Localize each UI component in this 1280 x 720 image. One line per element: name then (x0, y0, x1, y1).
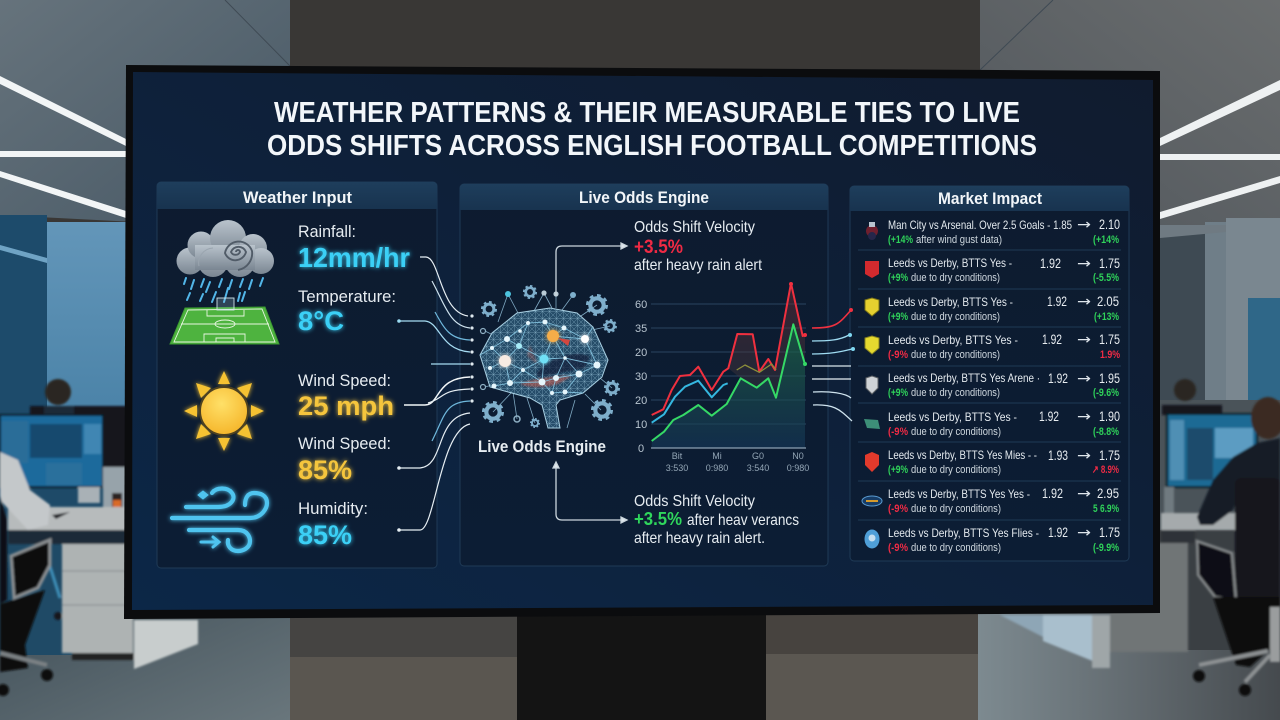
row 3: Leeds vs Derby: (+9% (888, 311, 908, 323)
chart y-axis labels: 0 (638, 443, 644, 455)
metric: rainfall: 12mm/hr (298, 242, 410, 273)
title: ODDS SHIFTS ACROSS ENGLISH FOOTBALL COMPETITIONS (267, 130, 1037, 162)
icon: rain cloud with spiral (176, 220, 274, 302)
row 2: Leeds vs Derby: (-5.5% (1093, 272, 1119, 284)
callout: odds shift velocity down: Odds Shift Velocity (634, 493, 755, 510)
row 6: Leeds vs Derby: due to dry conditions) (911, 426, 1001, 438)
weather panel header (157, 182, 437, 209)
row 3: Leeds vs Derby: Leeds vs Derby, BTTS Yes - (888, 295, 1013, 309)
row 8: Leeds vs Derby: → (1077, 486, 1091, 502)
callout: odds shift velocity down: after heavy rain alert. (634, 530, 765, 547)
metric: humidity: Humidity: (298, 499, 368, 518)
metric: wind speed percentage: 85% (298, 455, 352, 485)
metric: rainfall: Rainfall: (298, 222, 356, 241)
row 4: Leeds vs Derby: 1.75 (1099, 332, 1120, 347)
row 2: Leeds vs Derby: 1.92 (1040, 256, 1061, 271)
row 1: Man City vs Arsenal (866, 217, 1120, 246)
connectors: chart to market impact (812, 308, 855, 421)
row 9: Leeds vs Derby: (-9% (888, 542, 908, 554)
row 5: Leeds vs Derby: 1.92 (1048, 371, 1068, 386)
row 9: Leeds vs Derby: 1.75 (1099, 525, 1120, 540)
arrow: brain to odds shift up (556, 243, 627, 296)
row 1: Man City vs Arsenal: (+14% (888, 234, 913, 246)
row 7: Leeds vs Derby: due to dry conditions) (911, 464, 1001, 476)
row 8: Leeds vs Derby (862, 486, 1119, 515)
row 2: Leeds vs Derby (865, 256, 1120, 284)
chart x-axis labels: 0:980 (787, 463, 809, 473)
row 5: Leeds vs Derby: 1.95 (1099, 371, 1120, 386)
chart y-axis labels: 35 (635, 323, 647, 335)
row 2: Leeds vs Derby: → (1077, 256, 1091, 272)
row 3: Leeds vs Derby: 1.92 (1047, 294, 1067, 309)
row 4: Leeds vs Derby: Leeds vs Derby, BTTS Yes - (888, 333, 1018, 347)
row 5: Leeds vs Derby: → (1077, 371, 1091, 387)
chart x-axis labels: 3:540 (747, 463, 769, 473)
row 4: Leeds vs Derby (865, 332, 1120, 361)
row 1: Man City vs Arsenal: → (1077, 217, 1091, 233)
row 6: Leeds vs Derby (864, 409, 1120, 438)
office scene right: desk, monitor and workers (1000, 379, 1280, 696)
row 5: Leeds vs Derby (866, 371, 1120, 399)
metric: wind speed: 25 mph (298, 391, 394, 421)
line chart: odds movement (635, 282, 809, 473)
row 5: Leeds vs Derby: Leeds vs Derby, BTTS Yes Arene · (888, 371, 1040, 385)
market panel header (850, 186, 1129, 211)
market panel header: Market Impact (938, 189, 1042, 208)
row 3: Leeds vs Derby: 2.05 (1097, 294, 1119, 309)
row 9: Leeds vs Derby: due to dry conditions) (911, 542, 1001, 554)
row 1: Man City vs Arsenal: Man City vs Arsenal. Over 2.5 Goals - 1.85 (888, 218, 1072, 232)
metric: wind speed percentage: Wind Speed: (298, 434, 391, 453)
row 9: Leeds vs Derby (864, 525, 1120, 554)
row 9: Leeds vs Derby: Leeds vs Derby, BTTS Yes Flies - (888, 526, 1039, 540)
row 6: Leeds vs Derby: 1.90 (1099, 409, 1120, 424)
row 7: Leeds vs Derby (865, 448, 1120, 476)
chart y-axis labels: 60 (635, 299, 647, 311)
row 2: Leeds vs Derby: (+9% (888, 272, 908, 284)
metric: wind speed: Wind Speed: (298, 371, 391, 390)
chart y-axis labels: 30 (635, 371, 647, 383)
row 6: Leeds vs Derby: (-8.8% (1093, 426, 1119, 438)
row 7: Leeds vs Derby: 1.75 (1099, 448, 1120, 463)
title (267, 97, 1037, 162)
panel: live odds engine (460, 184, 828, 566)
metric: humidity: 85% (298, 520, 352, 550)
ceiling lights right (1160, 80, 1280, 219)
live odds panel header: Live Odds Engine (579, 188, 709, 207)
row 6: Leeds vs Derby: (-9% (888, 426, 908, 438)
metric: wind speed percentage (298, 434, 391, 485)
chart y-axis labels: 20 (635, 347, 647, 359)
row 1: Man City vs Arsenal: (+14% (1093, 234, 1119, 246)
weather panel header: Weather Input (243, 188, 352, 207)
row 8: Leeds vs Derby: due to dry conditions) (911, 503, 1001, 515)
row 7: Leeds vs Derby: (+9% (888, 464, 908, 476)
icon gears around brain (480, 286, 619, 427)
callout: odds shift velocity down: +3.5% (634, 509, 682, 529)
panel: market impact (850, 186, 1129, 561)
row 9: Leeds vs Derby: (-9.9% (1093, 542, 1119, 554)
icon: wind (172, 488, 267, 551)
wall screen right (1248, 298, 1280, 400)
chart x-axis labels: 3:530 (666, 463, 688, 473)
row 6: Leeds vs Derby: 1.92 (1039, 409, 1059, 424)
row 1: Man City vs Arsenal: 2.10 (1099, 217, 1120, 232)
row 8: Leeds vs Derby: 1.92 (1042, 486, 1063, 501)
chart y-axis labels (635, 299, 647, 455)
metric: temperature: Temperature: (298, 287, 396, 306)
callout: odds shift velocity up (634, 219, 762, 274)
row 9: Leeds vs Derby: → (1077, 525, 1091, 541)
row 7: Leeds vs Derby: 1.93 (1048, 448, 1068, 463)
arrow: brain to odds shift down (553, 462, 627, 523)
chart x-axis labels: 0:980 (706, 463, 728, 473)
display frame (124, 65, 1160, 619)
row 8: Leeds vs Derby: 5 6.9% (1093, 503, 1119, 515)
row 4: Leeds vs Derby: due to dry conditions) (911, 349, 1000, 361)
row 8: Leeds vs Derby: Leeds vs Derby, BTTS Yes Yes - (888, 487, 1030, 501)
row 8: Leeds vs Derby: (-9% (888, 503, 908, 515)
row 1: Man City vs Arsenal: after wind gust data) (916, 234, 1002, 246)
row 4: Leeds vs Derby: → (1077, 332, 1091, 348)
metric: rainfall (298, 222, 410, 273)
metric: temperature: 8°C (298, 306, 344, 336)
row 6: Leeds vs Derby: → (1077, 409, 1091, 425)
chart x-axis labels: G0 (752, 451, 764, 461)
metric: temperature (298, 287, 396, 336)
title: WEATHER PATTERNS & THEIR MEASURABLE TIES TO LIVE (274, 97, 1020, 129)
row 7: Leeds vs Derby: ↗ 8.9% (1092, 464, 1119, 476)
ceiling lights left (0, 76, 126, 218)
chart y-axis labels: 10 (635, 419, 647, 431)
chart x-axis labels: Mi (712, 451, 722, 461)
row 7: Leeds vs Derby: → (1077, 448, 1091, 464)
metric: wind speed (298, 371, 394, 421)
row 6: Leeds vs Derby: Leeds vs Derby, BTTS Yes - (888, 410, 1017, 424)
display pedestal (517, 612, 766, 720)
row 2: Leeds vs Derby: Leeds vs Derby, BTTS Yes - (888, 256, 1012, 270)
callout: odds shift velocity up: +3.5% (634, 237, 683, 258)
row 9: Leeds vs Derby: 1.92 (1048, 525, 1068, 540)
connectors: weather inputs to engine (397, 257, 474, 532)
display screen (132, 72, 1153, 610)
icon: football pitch (170, 298, 279, 344)
row 5: Leeds vs Derby: (+9% (888, 387, 908, 399)
row 5: Leeds vs Derby: (-9.6% (1093, 387, 1119, 399)
chart x-axis labels (666, 451, 809, 473)
office scene left: desk, monitor and workers (0, 379, 198, 696)
row 5: Leeds vs Derby: due to dry conditions) (911, 387, 1000, 399)
row 3: Leeds vs Derby (865, 294, 1119, 323)
icon: sun (184, 371, 264, 451)
row 3: Leeds vs Derby: (+13% (1094, 311, 1119, 323)
brain caption: Live Odds Engine (478, 437, 606, 456)
row 3: Leeds vs Derby: due to dry conditions) (911, 311, 1000, 323)
chart y-axis labels: 20 (635, 395, 647, 407)
callout: odds shift velocity up: Odds Shift Velocity (634, 219, 755, 236)
icon: neural network brain (480, 286, 619, 428)
panel: weather input (157, 182, 437, 568)
row 2: Leeds vs Derby: 1.75 (1099, 256, 1120, 271)
row 8: Leeds vs Derby: 2.95 (1097, 486, 1119, 501)
metric: humidity (298, 499, 368, 550)
chart lines (652, 282, 807, 441)
row 4: Leeds vs Derby: (-9% (888, 349, 908, 361)
callout: odds shift velocity down (634, 493, 799, 547)
row 3: Leeds vs Derby: → (1077, 294, 1091, 310)
chart x-axis labels: Bit (672, 451, 683, 461)
callout: odds shift velocity up: after heavy rain alert (634, 257, 762, 274)
row 2: Leeds vs Derby: due to dry conditions) (911, 272, 1000, 284)
callout: odds shift velocity down: after heav verancs (687, 512, 799, 529)
row 7: Leeds vs Derby: Leeds vs Derby, BTTS Yes Mies - - (888, 448, 1037, 462)
chart x-axis labels: N0 (792, 451, 804, 461)
row 4: Leeds vs Derby: 1.92 (1042, 332, 1062, 347)
live odds panel header (460, 184, 828, 210)
row 4: Leeds vs Derby: 1.9% (1100, 349, 1120, 361)
